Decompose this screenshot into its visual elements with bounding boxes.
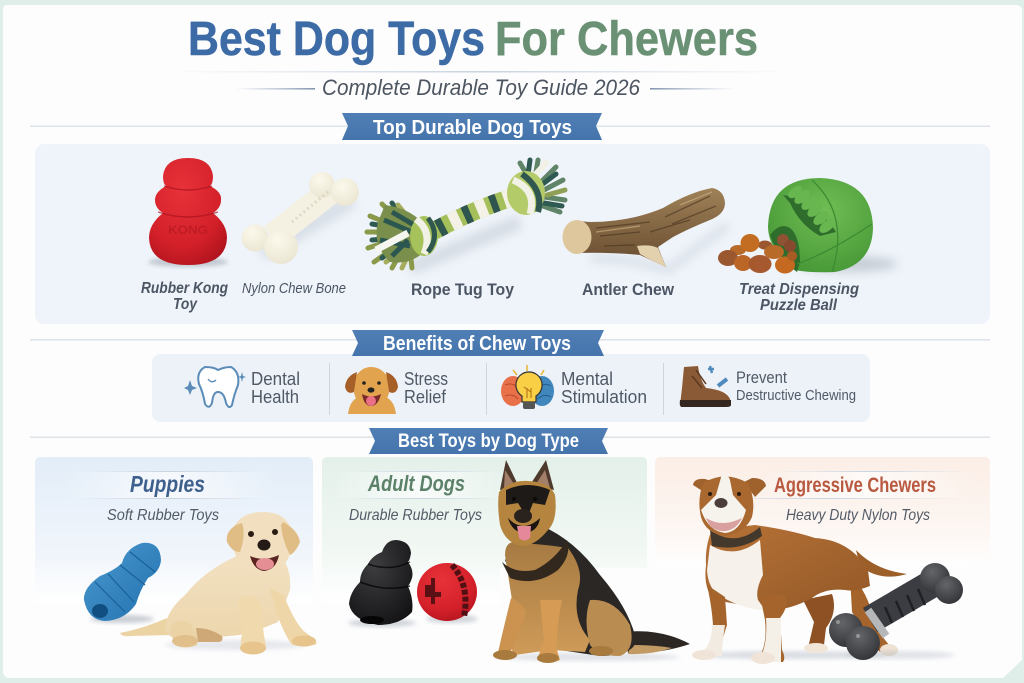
heading: adult dogs: Adult Dogs [367, 471, 465, 496]
text: mental stimulation: Mental [561, 369, 613, 389]
text: stress relief: Relief [404, 387, 447, 407]
panel: adult dogs [322, 457, 690, 663]
ribbon heading: top durable dog toys: Top Durable Dog Toys [373, 117, 572, 139]
text: stress relief: Stress [404, 369, 448, 389]
panel: benefits of chew toys [152, 354, 870, 422]
dog: german shepherd [493, 460, 690, 663]
toy: rubber kong: KONG [168, 223, 208, 237]
dog: yellow labrador puppy [120, 512, 317, 654]
toy: rubber kong [148, 158, 228, 267]
text: stress relief [404, 369, 448, 407]
toy: red puzzle ball [417, 563, 478, 623]
toy labels: Rubber Kong [141, 280, 228, 297]
toy labels: Antler Chew [582, 280, 675, 299]
panel: puppies [35, 457, 317, 654]
toy labels: Rope Tug Toy [411, 280, 514, 299]
subtitle: Complete Durable Toy Guide 2026 [322, 75, 641, 100]
toy labels: Toy [173, 296, 198, 313]
icon: chewed boot [680, 366, 731, 407]
ribbon heading: best toys by dog type: Best Toys by Dog Type [398, 431, 579, 452]
icon: happy dog [345, 367, 398, 414]
sub: heavy duty nylon toys: Heavy Duty Nylon Toys [786, 507, 930, 524]
icon: brain and light bulb [501, 365, 554, 409]
heading: aggressive chewers: Aggressive Chewers [774, 474, 936, 497]
text: dental health: Health [251, 387, 299, 407]
toy: black rubber toy [348, 540, 416, 627]
panel: aggressive chewers [655, 457, 990, 664]
text: prevent destructive chewing [736, 368, 856, 404]
toy labels: Nylon Chew Bone [242, 280, 346, 297]
text: dental health: Dental [251, 369, 300, 389]
panel: top durable toys [35, 144, 990, 324]
ribbon heading: top durable dog toys [342, 113, 602, 140]
sub: durable rubber toys: Durable Rubber Toys [349, 507, 482, 524]
dog: american bully [692, 474, 907, 664]
heading: puppies: Puppies [130, 471, 205, 497]
text: mental stimulation [561, 369, 647, 407]
toy: heavy duty black bone [829, 563, 963, 660]
text: prevent destructive chewing: Prevent [736, 368, 787, 387]
text: dental health [251, 369, 300, 407]
title: Best Dog Toys [188, 13, 485, 66]
toy labels: Treat Dispensing [739, 281, 859, 298]
title: For Chewers [495, 13, 758, 66]
toy: blue rubber toy [84, 543, 161, 623]
title [188, 13, 758, 66]
toy: antler chew [562, 188, 728, 270]
toy: rope tug [367, 160, 565, 268]
toy: treat dispensing puzzle ball [718, 178, 898, 274]
sub: soft rubber toys: Soft Rubber Toys [107, 507, 219, 524]
toy: nylon chew bone [242, 172, 359, 264]
text: mental stimulation: Stimulation [561, 387, 647, 407]
ribbon heading: benefits of chew toys: Benefits of Chew Toys [383, 333, 571, 355]
toy labels [141, 280, 859, 314]
text: prevent destructive chewing: Destructive Chewing [736, 387, 856, 404]
toy labels: Puzzle Ball [760, 297, 838, 314]
icon: tooth [184, 367, 246, 407]
